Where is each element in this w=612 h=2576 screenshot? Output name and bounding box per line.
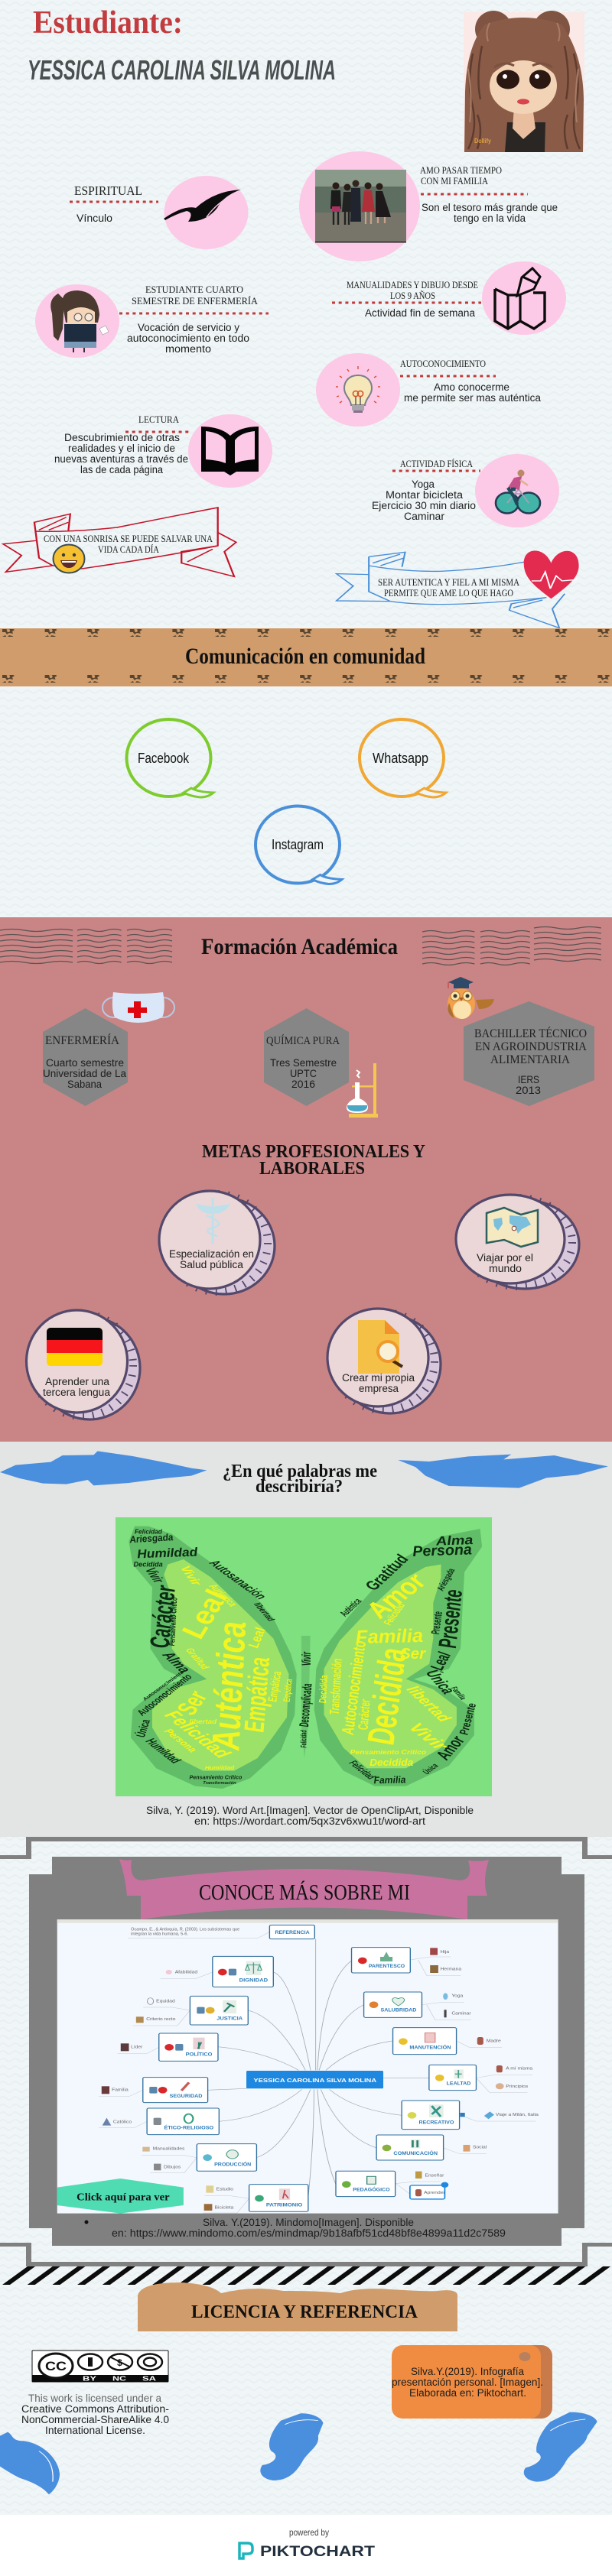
yellow words: Transformación [328,1659,346,1715]
ribbon: blue [337,552,565,628]
text: realidades y el inicio de [68,443,175,454]
coin: especializacion: Salud pública [180,1259,244,1270]
node: salubridad: Yoga [451,1994,464,1998]
node: produccion: Manualidades [153,2147,184,2151]
black words: Gratitud [360,1552,413,1593]
yellow words: Leal [174,1587,236,1641]
heading: metas: METAS PROFESIONALES Y [202,1142,425,1162]
heading: describiría? [256,1477,343,1497]
icon: caduceus [196,1198,230,1244]
node: produccion: Dibujos [164,2166,181,2169]
item: actividad fisica [372,454,559,527]
black words: Única [132,1718,153,1738]
item: espiritual [70,176,248,249]
text: Montar bicicleta [386,489,464,501]
yellow words: libertad [402,1683,455,1724]
logo: piktochart: PIKTOCHART [260,2544,375,2560]
text: nuevas aventuras a través de [54,453,188,465]
black words: Felicidad [299,1730,309,1748]
black words: Felicidad [347,1759,379,1781]
black words: Autosanación [206,1558,269,1601]
connectors [99,1932,536,2213]
coin: empresa: empresa [359,1383,399,1394]
icon: heart with pulse [524,550,579,599]
black words: Ariesgada [129,1532,174,1545]
black words: Única [421,1762,441,1776]
photo on pink circle [299,151,420,261]
tag: infographic reference [392,2345,552,2419]
yellow words: Decidida [317,1675,330,1703]
heading: ¿En qué palabras me [223,1462,377,1481]
hexagon: quimica: Tres Semestre [270,1057,337,1069]
item: manualidades [332,261,566,335]
coin: aprender [26,1310,140,1419]
node: salubridad: SALUBRIDAD [380,2007,417,2013]
icon: german flag [47,1328,103,1366]
license text: NonCommercial-ShareAlike 4.0 [21,2414,169,2425]
title: Estudiante: Estudiante: [33,5,183,41]
black words: Autoconocimiento [142,1670,186,1702]
black words: Decidida [133,1560,163,1569]
node: recreativo: Viaje a Milán, Italia [496,2114,539,2117]
hexagon: bachiller: IERS [518,1074,539,1085]
black words [129,1529,479,1786]
icon: graduate owl [448,977,494,1019]
caption [146,1805,474,1827]
heading: metas: LABORALES [259,1159,365,1179]
right wing [314,1529,482,1786]
icon: document search [358,1320,402,1374]
node: salubridad: Caminar [451,2012,471,2016]
yellow words: Pensamiento Crítico [350,1749,426,1756]
text: Yoga [412,479,435,490]
yellow words: Empática [265,1671,284,1702]
yellow words: Decidida [359,1647,415,1746]
item: familia [299,151,558,261]
bubble: instagram [256,806,342,884]
brush strokes [0,1451,608,1488]
node: politico: Líder [131,2046,142,2049]
yellow words: Amor [357,1569,435,1623]
hexagon: bachiller: EN AGROINDUSTRIA [475,1040,587,1053]
black words: Auténtica [337,1597,364,1618]
heading: AMO PASAR TIEMPO [420,165,502,176]
node: seguridad: Familia [112,2088,129,2092]
node: produccion: PRODUCCIÓN [214,2161,251,2167]
black words: Única [422,1667,460,1696]
node: justicia: JUSTICIA [216,2015,243,2021]
caption: Silva, Y. (2019). Word Art.[Imagen]. Vector de OpenClipArt, Disponible [146,1805,474,1816]
black words: Descomplicada [298,1683,315,1727]
node: referencia: integran la vida humana, 5-6. [131,1932,188,1936]
button: click aqui [57,2179,184,2214]
text [378,576,520,599]
black words: Transformación [203,1781,236,1786]
node: parentesco: Hija [441,1951,450,1955]
node: referencia [131,1925,314,1939]
yellow words: libertad [189,1718,217,1725]
icon: flask on stand [347,1063,378,1118]
node: dignidad: Afabilidad [175,1971,197,1974]
word art butterfly [116,1517,492,1796]
text: PERMITE QUE AME LO QUE HAGO [384,587,513,599]
black words: Familia [448,1685,468,1701]
node: etico-religioso [103,2108,219,2135]
yellow words: Familia [355,1625,424,1647]
heading [420,165,502,187]
black words: Alma [158,1649,194,1675]
hexagon: quimica: 2016 [291,1079,315,1090]
text [404,381,541,404]
node: lealtad: A mí misma [506,2067,533,2071]
license text: International License. [45,2425,145,2436]
icon: map [487,1208,538,1247]
badge: creative commons: CC [45,2359,67,2373]
section: about me [3,5,584,628]
black words: Carácter [145,1584,182,1649]
coin: aprender: Aprender una [45,1376,110,1387]
node: parentesco [352,1948,462,1973]
black words: Vivir [142,1566,167,1585]
icon: cyclist [475,454,559,527]
black words: Persona [412,1541,473,1560]
tag: infographic reference: presentación personal. [Imagen]. [392,2376,543,2388]
text: CON UNA SONRISA SE PUEDE SALVAR UNA [44,533,213,544]
node: lealtad: Principios [506,2085,528,2089]
text: momento [165,343,211,355]
section: palabras [0,1442,612,1837]
ribbon: red [3,508,236,576]
node: politico [121,2033,218,2061]
text [127,322,249,355]
yellow words: Autoconocimiento [339,1640,370,1736]
heading: ESTUDIANTE CUARTO [145,284,243,295]
heading: ESPIRITUAL [74,183,142,198]
yellow words: Felicidad [160,1708,235,1762]
node: recreativo [402,2101,539,2130]
yellow words: Vivir [177,1565,204,1588]
license text: Creative Commons Attribution- [21,2403,169,2415]
powered by: powered by [289,2527,329,2538]
license text [21,2393,169,2436]
text: Actividad fin de semana [365,307,475,319]
yellow words: Felicidad [380,1601,408,1627]
badge: creative commons: SA [142,2374,156,2382]
callout: autentica ribbon [337,550,579,628]
node: manutencion: Madre [487,2039,502,2043]
hexagon: enfermeria: Sabana [67,1079,102,1090]
central node: YESSICA CAROLINA SILVA MOLINA [253,2077,377,2084]
node: justicia [136,1996,248,2025]
black words: Leal [427,1650,456,1672]
node: recreativo: RECREATIVO [418,2120,454,2125]
band header [0,628,612,686]
text: tengo en la vida [454,213,526,224]
bubble: whatsapp [360,719,446,797]
coin: especializacion: Especialización en [169,1248,254,1260]
text [44,533,213,555]
yellow words: Decidida [369,1757,414,1768]
yellow words: Ser [171,1688,214,1718]
portrait: doll avatar: Dollify [474,138,491,144]
node: dignidad [166,1956,273,1987]
icon: book and pencil [482,261,566,335]
button: click aqui: Click aquí para ver [76,2191,170,2203]
yellow words: Empática [282,1679,295,1702]
text: Son el tesoro más grande que [422,202,558,213]
node: seguridad [102,2078,208,2103]
node: etico-religioso: ÉTICO-RELIGIOSO [164,2124,213,2130]
black words: Alma [435,1533,474,1549]
node: parentesco: PARENTESCO [369,1963,405,1969]
heading plate: LICENCIA Y REFERENCIA [191,2302,418,2322]
hexagon: bachiller: BACHILLER TÉCNICO [474,1026,587,1040]
yellow words: Humildad [205,1765,234,1771]
node: referencia: REFERENCIA [275,1929,310,1935]
icon: light bulb [316,353,400,427]
node: seguridad: SEGURIDAD [170,2093,203,2099]
icon: student figure [35,284,119,358]
black words: Pensamiento Crítico [189,1774,242,1781]
coin: especializacion [159,1191,275,1294]
heading: LECTURA [138,414,180,425]
section: licencia [0,2282,597,2494]
heading [347,280,478,301]
node: patrimonio: PATRIMONIO [266,2201,302,2208]
node: manutencion [393,2028,502,2055]
black words: Presente [428,1611,445,1635]
mind map [57,1919,558,2214]
badge: creative commons: $ [117,2357,122,2368]
black words: Autoconocimiento [134,1672,195,1718]
hexagon: quimica [264,1008,349,1106]
heading: AUTOCONOCIMIENTO [400,358,486,369]
logo: piktochart [239,2543,375,2560]
heading: CON MI FAMILIA [421,176,488,187]
heading: Formación Académica [201,934,398,959]
heading: LOS 9 AÑOS [390,290,435,301]
node: parentesco: Hermana [441,1968,462,1971]
hexagon: quimica: QUÍMICA PURA [266,1034,340,1047]
node: comunicacion: Social [473,2146,487,2149]
black words: Presente [457,1702,479,1735]
text: SER AUTENTICA Y FIEL A MI MISMA [378,576,520,588]
black words: Ariesgada [435,1568,457,1592]
coin: empresa [327,1309,441,1413]
hexagon: enfermeria [43,1008,128,1106]
black words: libertad [252,1601,276,1623]
yellow words: Leal [246,1627,269,1649]
black words: Amor [431,1734,470,1763]
reference text: en: https://www.mindomo.com/es/mindmap/9b18afbf51cd48bf8e4899a11d2c7589 [112,2227,506,2239]
icon: swoosh on pink circle [164,176,248,249]
text: Ejercicio 30 min diario [372,500,476,511]
node: justicia: Equidad [156,2000,175,2003]
item: lectura [54,414,272,488]
heading: metas [202,1142,425,1179]
node: pedagogico [336,2171,448,2199]
badge: creative commons [32,2351,168,2382]
heading: Comunicación en comunidad [185,644,425,669]
yellow words: Auténtica [204,1621,255,1751]
callout: sonrisa ribbon [3,508,236,576]
heading [223,1462,377,1497]
node: justicia: Criterio recto [146,2018,176,2022]
black words: Vivir [300,1652,314,1666]
yellow words: Gratitud [183,1646,212,1671]
text [422,202,558,224]
banner [119,1859,489,1919]
hexagon: enfermeria: ENFERMERÍA [45,1033,119,1047]
text: Vocación de servicio y [138,322,239,333]
text: Descubrimiento de otras [64,432,180,443]
yellow words: Auténtica [207,1582,239,1608]
bubble: facebook: Facebook [138,751,190,766]
grey panel [29,1857,584,2246]
hexagon: bachiller: 2013 [516,1085,541,1096]
bubble: whatsapp: Whatsapp [373,751,428,766]
text: autoconocimiento en todo [127,333,249,344]
text: Caminar [404,511,445,522]
badge: creative commons: NC [112,2374,126,2382]
butterfly body [301,1636,311,1758]
node: pedagogico: Aprender [424,2192,445,2195]
reference text [84,2217,506,2239]
text [54,432,188,475]
section: conoce mas [0,1837,612,2266]
subtitle: name: YESSICA CAROLINA SILVA MOLINA [28,54,336,86]
node: manutencion: MANUTENCIÓN [409,2044,451,2050]
section: formacion academica [0,917,612,1442]
portrait: doll avatar [464,11,584,152]
yellow words: Persona [162,1727,200,1754]
hexagon: quimica: UPTC [290,1068,317,1079]
heading: SEMESTRE DE ENFERMERÍA [132,296,258,307]
section: comunicacion [0,628,612,884]
black words: Pensamiento Crítico [168,1598,179,1646]
central node [246,2071,383,2088]
yellow words: Carácter [356,1698,374,1730]
hexagon: enfermeria: Cuarto semestre [46,1057,124,1069]
tag: infographic reference: Silva.Y.(2019). Infografía [411,2366,524,2377]
node: etico-religioso: Católico [113,2120,132,2124]
yellow words: Empática [238,1656,276,1733]
coin: viajar: Viajar por el [477,1252,533,1264]
tag: infographic reference: Elaborada en: Piktochart. [409,2387,526,2399]
item: autoconocimiento [316,353,541,427]
icon: medical mask [103,992,174,1023]
node: pedagogico: PEDAGÓGICO [353,2186,390,2192]
icon: open book [188,414,272,488]
heading plate [138,2282,457,2331]
caption: en: https://wordart.com/5qx3zv6xwu1t/word-art [194,1815,425,1827]
heading [132,284,258,307]
heading: CONOCE MÁS SOBRE MI [199,1881,410,1905]
item: estudiante [35,284,269,358]
black words: Humildad [136,1546,198,1561]
coin: aprender: tercera lengua [43,1387,110,1398]
bubble: facebook [127,719,213,797]
black words: Presente [433,1589,467,1649]
text: Amo conocerme [434,381,509,393]
node: lealtad [429,2065,533,2091]
node: dignidad: DIGNIDAD [239,1977,269,1983]
bubble: instagram: Instagram [272,837,324,852]
yellow words [160,1565,455,1771]
coin: empresa: Crear mi propia [342,1372,415,1384]
node: produccion [142,2144,256,2171]
node: pedagogico: Enseñar [425,2174,444,2178]
reference text: Silva. Y.(2019). Mindomo[Imagen]. Disponible [203,2217,414,2228]
hexagon: bachiller: ALIMENTARIA [490,1053,570,1066]
stripe divider [2,2266,610,2285]
hexagon: enfermeria: Universidad de La [43,1068,126,1079]
text: me permite ser mas auténtica [404,392,541,404]
text: las de cada página [80,464,163,475]
node: comunicacion: COMUNICACIÓN [393,2150,438,2156]
node: patrimonio: Bicicleta [215,2206,234,2210]
left wing [129,1526,297,1789]
hexagon: bachiller [464,1001,594,1106]
node: salubridad [364,1992,471,2017]
license text: This work is licensed under a [28,2393,161,2404]
black words: Humildad [142,1737,184,1766]
black words: Familia [373,1775,406,1786]
coin: viajar: mundo [489,1263,522,1274]
stepped frame [0,1837,612,2266]
node: lealtad: LEALTAD [447,2080,471,2086]
heading: ACTIVIDAD FÍSICA [400,459,473,469]
badge: creative commons: BY [83,2374,96,2382]
yellow words: Vivir [405,1720,453,1754]
decorative blue feathers [0,2412,597,2494]
black words: Felicidad [135,1529,163,1536]
text: VIDA CADA DÍA [98,543,160,555]
yellow words: Ser [400,1646,427,1663]
text: Vínculo [76,213,112,224]
footer [0,2515,612,2576]
node: comunicacion [376,2135,487,2160]
text [372,479,476,522]
node: politico: POLÍTICO [186,2051,213,2057]
icon: smiley [54,544,84,573]
node: patrimonio [204,2185,308,2211]
node: referencia: Ocampo, E., & Antioquia, R. (2003). Los subsistemas que [131,1928,240,1932]
node: patrimonio: Estudio [216,2188,234,2192]
heading: MANUALIDADES Y DIBUJO DESDE [347,280,478,290]
coin: viajar [456,1195,579,1289]
